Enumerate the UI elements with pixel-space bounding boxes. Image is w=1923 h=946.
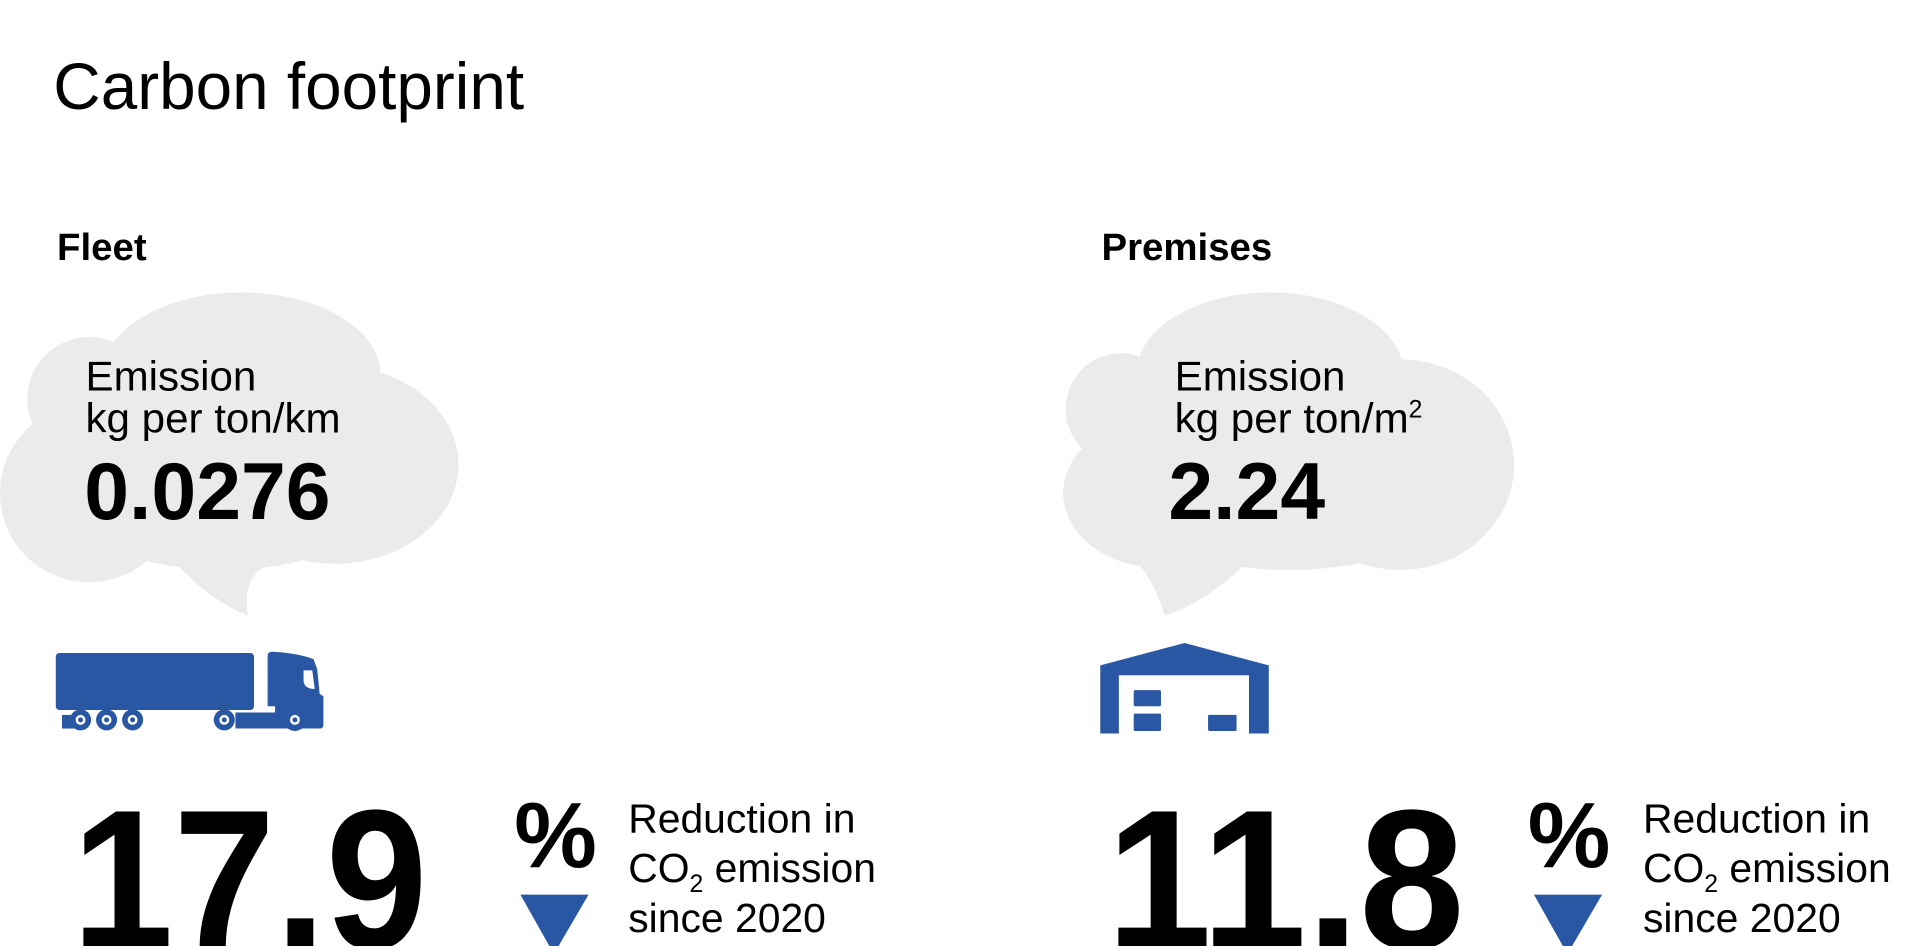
reduction text: premises: CO <box>1643 845 1704 891</box>
panel: fleet <box>0 226 876 946</box>
emission text: premises <box>1168 352 1422 537</box>
emission text: fleet: 0.0276 <box>84 447 331 537</box>
cloud: premises emission <box>1063 292 1514 616</box>
reduction text: premises: since 2020 <box>1643 895 1841 941</box>
emission text: premises: kg per ton/m <box>1175 394 1409 441</box>
cloud: fleet emission <box>0 292 458 616</box>
emission text: premises: Emission <box>1175 352 1345 399</box>
reduction text: fleet: emission <box>703 845 876 891</box>
panel: premises <box>1063 226 1891 946</box>
reduction text: premises: emission <box>1718 845 1891 891</box>
reduction text: premises: Reduction in <box>1643 796 1870 842</box>
icon: truck <box>56 652 323 731</box>
percent sign: % <box>1528 783 1610 887</box>
heading: premises: Premises <box>1102 226 1272 269</box>
emission text: fleet: Emission <box>86 352 256 399</box>
title: Carbon footprint <box>53 50 524 123</box>
reduction text: fleet: since 2020 <box>628 895 826 941</box>
emission text: premises: 2.24 <box>1168 447 1325 537</box>
icon: down arrow <box>1534 895 1602 946</box>
reduction text: premises <box>1643 796 1891 941</box>
heading: fleet: Fleet <box>57 226 147 269</box>
reduction text: fleet <box>628 796 876 941</box>
icon: down arrow <box>520 895 589 946</box>
reduction text: fleet: CO <box>628 845 690 891</box>
percent sign: % <box>514 783 597 887</box>
reduction text: fleet: 2 <box>690 871 703 898</box>
icon: warehouse <box>1100 643 1269 734</box>
emission text: fleet <box>84 352 341 537</box>
emission text: premises: 2 <box>1409 397 1422 424</box>
reduction text: premises: 2 <box>1704 871 1718 898</box>
reduction text: fleet: Reduction in <box>628 796 855 842</box>
emission text: fleet: kg per ton/km <box>86 394 341 441</box>
